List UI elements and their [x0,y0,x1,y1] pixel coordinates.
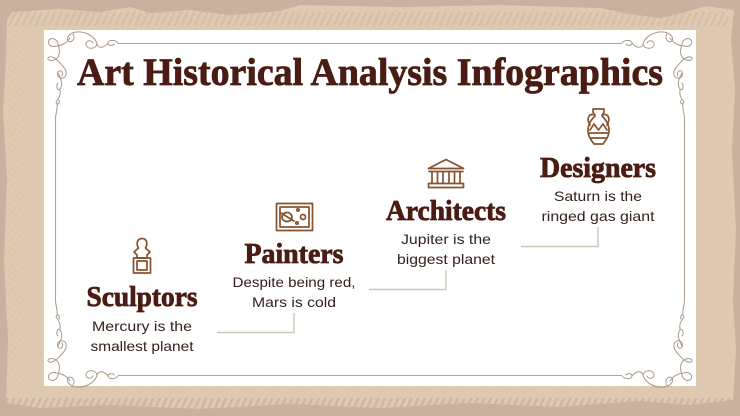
icon: sculpture [134,238,150,273]
heading: designers: Designers [540,153,656,184]
text: smallest planet: smallest planet [90,338,194,354]
connector line [369,270,446,290]
heading: architects: Architects [386,196,506,227]
text: mercury: Mercury is the [92,318,192,334]
icon: amphora vase [588,109,609,144]
icon: framed planet painting [276,204,312,230]
title: Art Historical Analysis Infographics [77,51,663,94]
white panel [44,30,696,386]
text: jupiter: Jupiter is the [401,231,491,247]
heading: sculptors: Sculptors [86,282,198,313]
icon: classical temple [428,160,464,188]
step: painters [232,204,446,310]
text: despite being red: Despite being red, [232,274,356,290]
heading: painters: Painters [244,239,344,270]
text: saturn: Saturn is the [554,188,642,204]
step: architects [386,160,598,267]
step: sculptors [86,238,294,354]
text: ringed gas giant: ringed gas giant [542,208,655,224]
ornamental frame [48,32,692,387]
connector line [217,313,294,332]
connector line [521,227,598,246]
text: mars is cold: Mars is cold [252,294,336,310]
text: biggest planet: biggest planet [397,251,495,267]
step: designers [540,109,656,224]
